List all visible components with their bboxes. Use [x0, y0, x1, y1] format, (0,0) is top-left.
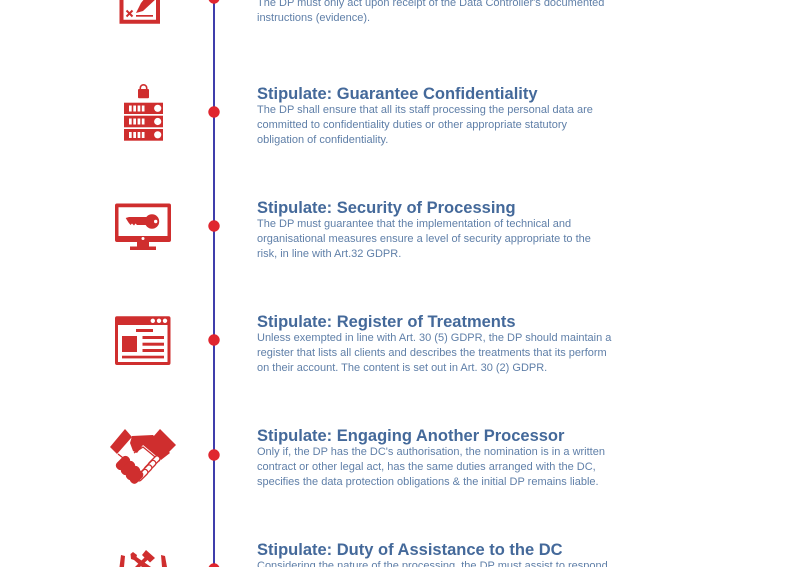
icon: browser window — [115, 316, 170, 365]
text block: guarantee confidentiality: Stipulate: Guarantee Confidentiality — [257, 85, 538, 103]
icon: tools — [120, 550, 167, 567]
text block: engaging another processor: contract or other legal act, has the same duties arranged with the DC, — [257, 461, 596, 473]
text block: register of treatments: on their account. The content is set out in Art. 30 (2) GDPR. — [257, 362, 547, 374]
text block: guarantee confidentiality — [257, 85, 593, 146]
text block: register of treatments — [257, 313, 612, 374]
text block: guarantee confidentiality: The DP shall ensure that all its staff processing the personal data are — [257, 104, 593, 116]
text block: register of treatments: Stipulate: Register of Treatments — [257, 313, 516, 331]
text block: duty of assistance — [257, 541, 608, 567]
text block: guarantee confidentiality: obligation of confidentiality. — [257, 134, 388, 146]
text block: instructions — [257, 0, 604, 24]
icon: handshake — [110, 429, 176, 485]
text block: engaging another processor: Stipulate: Engaging Another Processor — [257, 427, 564, 445]
icon: signed document — [120, 0, 160, 24]
text block: register of treatments: Unless exempted in line with Art. 30 (5) GDPR, the DP should maintain a — [257, 332, 611, 344]
icon: locked server — [124, 85, 163, 141]
text block: engaging another processor — [257, 427, 605, 488]
text block: engaging another processor: Only if, the DP has the DC's authorisation, the nomination is in a written — [257, 446, 605, 458]
text block: instructions: instructions (evidence). — [257, 12, 370, 24]
text block: security of processing: Stipulate: Security of Processing — [257, 199, 516, 217]
text block: security of processing: risk, in line with Art.32 GDPR. — [257, 248, 401, 260]
text block: guarantee confidentiality: committed to confidentiality duties or other appropriate statutory — [257, 119, 567, 131]
text block: security of processing: The DP must guarantee that the implementation of technical and — [257, 218, 571, 230]
text block: register of treatments: register that lists all clients and describes the treatments that its perform — [257, 347, 607, 359]
text block: engaging another processor: specifies the data protection obligations & the initial DP remains liable. — [257, 476, 599, 488]
icon: monitor with key — [115, 204, 171, 250]
timeline — [208, 0, 220, 567]
text block: security of processing: organisational measures ensure a level of security appropriate to the — [257, 233, 591, 245]
text block: security of processing — [257, 199, 591, 260]
text block: duty of assistance: Stipulate: Duty of Assistance to the DC — [257, 541, 563, 559]
